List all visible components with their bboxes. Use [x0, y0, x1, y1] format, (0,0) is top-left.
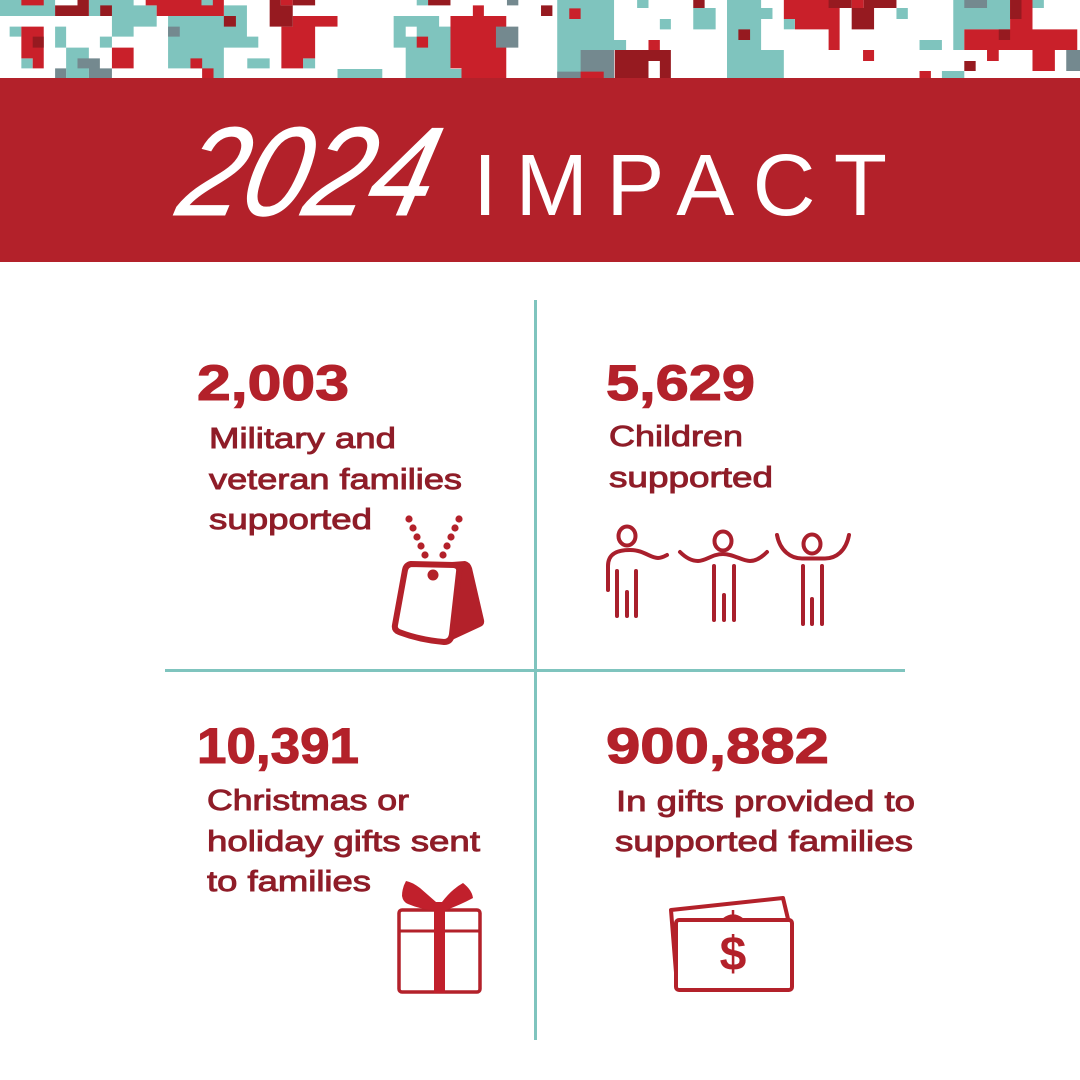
stat label: to families — [207, 866, 371, 898]
pixel camouflage banner — [0, 0, 1080, 78]
stat number: 10,391 — [197, 718, 359, 774]
icon: three children — [608, 526, 849, 624]
title year in script style: 2024 — [166, 102, 454, 243]
title word: IMPACT — [473, 137, 887, 234]
icon: dog tags — [395, 515, 484, 642]
stat label: supported families — [615, 826, 913, 858]
icon: gift box — [399, 881, 480, 993]
stat label: veteran families — [209, 464, 462, 496]
stat label: In gifts provided to — [616, 786, 915, 818]
stat label: Christmas or — [207, 785, 409, 817]
panel: military and veteran families — [197, 355, 484, 642]
title band — [0, 78, 1080, 262]
stat number: 5,629 — [606, 355, 755, 411]
stat label: holiday gifts sent — [207, 826, 480, 858]
panel: gifts value — [606, 718, 915, 990]
icon: money bills: $ — [720, 928, 747, 981]
stat label: Military and — [209, 423, 396, 455]
stat label: Children — [609, 421, 743, 453]
quadrant dividers — [165, 300, 905, 1040]
stat label — [609, 421, 773, 494]
stat label — [209, 423, 462, 536]
stat label — [207, 785, 480, 898]
icon: money bills — [671, 898, 792, 990]
panel: children supported — [606, 355, 849, 624]
panel: holiday gifts — [197, 718, 480, 993]
stat label: supported — [609, 462, 773, 494]
stat label — [615, 786, 915, 858]
title: 2024 IMPACT — [166, 102, 887, 243]
stat label: supported — [209, 504, 372, 536]
stat number: 2,003 — [197, 355, 349, 411]
stat number: 900,882 — [606, 718, 829, 774]
